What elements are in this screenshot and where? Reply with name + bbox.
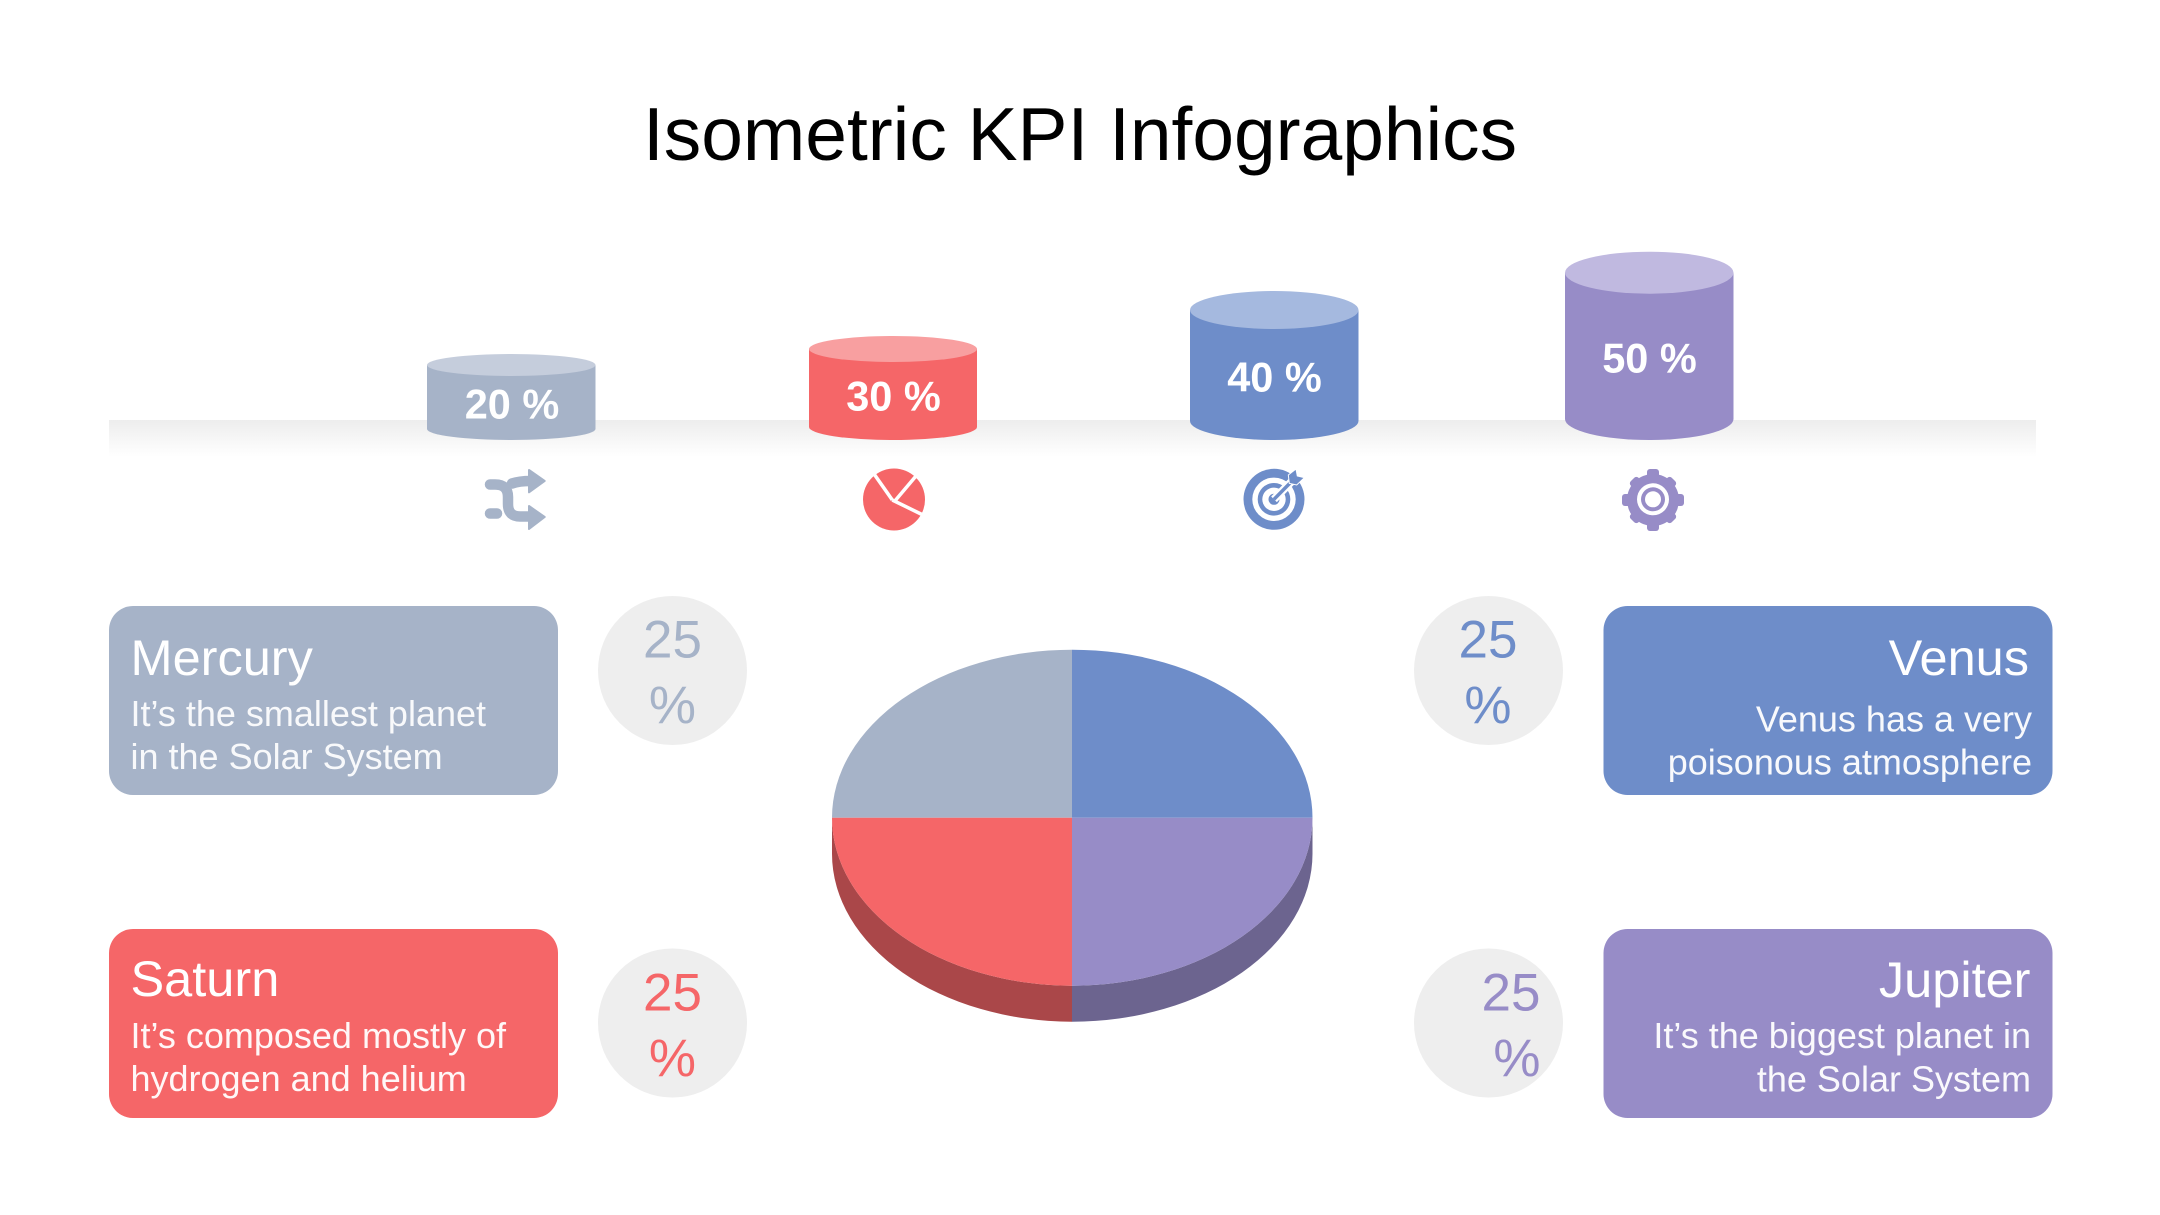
- panel: Venus: [1604, 606, 2052, 795]
- cylinder: 20 percent: [427, 354, 596, 440]
- pie side: purple: [1072, 818, 1312, 1022]
- panel: Mercury: in the Solar System: [130, 736, 443, 777]
- panel: Mercury: [109, 606, 558, 795]
- panel: Jupiter: the Solar System: [1757, 1059, 2031, 1100]
- cylinder: 30 percent: 30 %: [846, 372, 941, 420]
- badge: Venus 25 percent: 25: [1459, 611, 1517, 670]
- icon: gear: [1622, 469, 1684, 531]
- badge: Jupiter 25 percent: %: [1493, 1029, 1540, 1088]
- panel: Saturn: Saturn: [130, 950, 279, 1007]
- pie slice: red: [832, 818, 1072, 986]
- badge: Jupiter 25 percent: [1414, 948, 1563, 1098]
- panel: Venus: Venus: [1889, 629, 2029, 686]
- panel: Jupiter: [1604, 929, 2052, 1118]
- pie slice: purple: [1072, 818, 1312, 986]
- cylinder: 40 percent: [1190, 291, 1358, 440]
- 3D pie chart: [832, 650, 1312, 1022]
- panel: Venus: Venus has a very: [1756, 699, 2032, 740]
- badge: Venus 25 percent: %: [1464, 676, 1512, 735]
- pie slice: grey blue: [832, 650, 1072, 818]
- badge: Jupiter 25 percent: 25: [1482, 964, 1540, 1023]
- cylinder: 50 percent: 50 %: [1602, 334, 1697, 382]
- pie slice: blue: [1072, 650, 1312, 818]
- icon: pie chart: [863, 468, 925, 530]
- badge: Mercury 25 percent: 25: [643, 611, 702, 670]
- panel: Mercury: It’s the smallest planet: [130, 693, 486, 734]
- panel: Jupiter: Jupiter: [1879, 951, 2030, 1008]
- badge: Mercury 25 percent: [598, 596, 747, 745]
- cylinder: 40 percent: 40 %: [1227, 354, 1322, 400]
- panel: Venus: poisonous atmosphere: [1668, 741, 2032, 782]
- title: Isometric KPI Infographics: [643, 92, 1517, 176]
- panel: Mercury: Mercury: [130, 629, 314, 686]
- badge: Mercury 25 percent: %: [649, 676, 696, 735]
- panel: Saturn: hydrogen and helium: [130, 1058, 467, 1099]
- icon: shuffle arrows: [490, 470, 545, 529]
- baseline floor band: [109, 420, 2036, 457]
- badge: Saturn 25 percent: 25: [643, 964, 702, 1023]
- panel: Saturn: It’s composed mostly of: [130, 1015, 507, 1056]
- cylinder: 20 percent: 20 %: [465, 380, 559, 428]
- panel: Jupiter: It’s the biggest planet in: [1653, 1015, 2031, 1056]
- badge: Saturn 25 percent: %: [649, 1029, 696, 1088]
- icon: target with arrow: [1244, 469, 1304, 530]
- pie side: red: [832, 818, 1072, 1022]
- cylinder: 50 percent: [1565, 252, 1734, 440]
- badge: Venus 25 percent: [1414, 596, 1563, 745]
- panel: Saturn: [109, 929, 558, 1118]
- cylinder: 30 percent: [809, 336, 977, 440]
- badge: Saturn 25 percent: [598, 948, 747, 1098]
